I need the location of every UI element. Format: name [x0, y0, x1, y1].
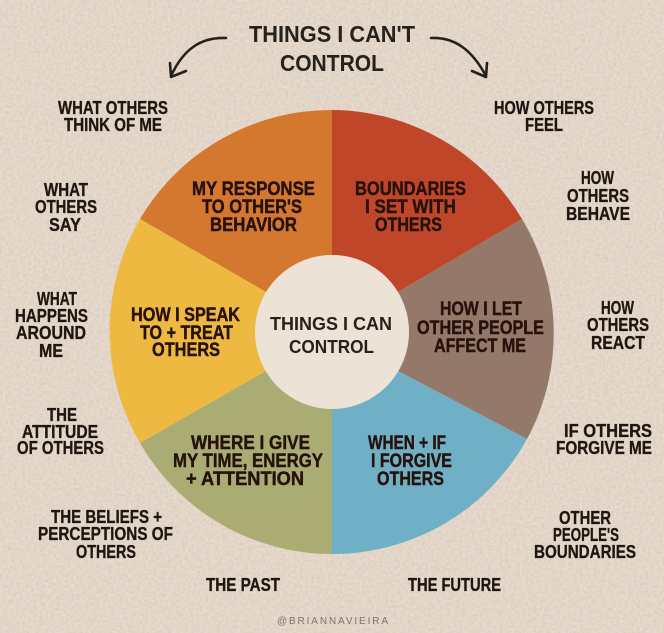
label: when + if: WHEN + IF	[368, 432, 446, 454]
center label: CONTROL	[289, 336, 374, 357]
outer label: how others behave: BEHAVE	[566, 203, 630, 224]
outer label: how others behave	[566, 167, 630, 224]
title	[249, 21, 415, 76]
label: how I speak: HOW I SPEAK	[131, 304, 240, 326]
label: how I speak	[131, 304, 240, 361]
title: THINGS I CAN'T	[249, 21, 415, 47]
outer label: what happens around me: WHAT	[37, 288, 78, 309]
outer label: other people's boundaries: OTHER	[559, 507, 611, 528]
outer label: other people's boundaries: PEOPLE'S	[553, 524, 619, 545]
label: my response: MY RESPONSE	[192, 178, 315, 200]
label: my response	[192, 178, 315, 236]
arrow: left	[170, 38, 226, 77]
label: boundaries: BOUNDARIES	[355, 178, 466, 200]
outer label: how others feel	[494, 97, 594, 135]
outer label: what happens around me: ME	[39, 340, 63, 361]
donut wheel	[110, 110, 554, 554]
outer label: what others say: SAY	[49, 214, 82, 235]
label: boundaries	[355, 178, 466, 236]
label: where I give: + ATTENTION	[186, 468, 304, 490]
segment: when + if	[332, 371, 527, 554]
outer label: the future: THE FUTURE	[408, 574, 501, 595]
label: how I let	[417, 298, 544, 357]
outer label: other people's boundaries: BOUNDARIES	[534, 541, 636, 562]
label: how I let: OTHER PEOPLE	[417, 317, 544, 339]
outer label: the attitude of others: THE	[47, 404, 77, 425]
outer label: if others forgive me	[556, 420, 652, 458]
label: my response: TO OTHER'S	[202, 196, 302, 218]
outer label: how others react	[587, 297, 649, 353]
center circle	[255, 255, 409, 409]
outer label: the attitude of others	[17, 404, 104, 458]
segment: my response	[140, 110, 332, 292]
segment: how I speak	[110, 219, 266, 443]
label: when + if: OTHERS	[377, 468, 444, 490]
credit: @BRIANNAVIEIRA	[277, 616, 388, 627]
outer label: if others forgive me: IF OTHERS	[564, 420, 652, 441]
label: my response: BEHAVIOR	[210, 214, 297, 236]
outer label: how others react: REACT	[591, 332, 646, 353]
outer label: what others think of me: WHAT OTHERS	[58, 97, 168, 118]
outer label: beliefs and perceptions	[38, 506, 173, 562]
title: CONTROL	[280, 50, 384, 76]
segment: where I give	[140, 371, 332, 554]
outer label: how others react: OTHERS	[587, 314, 649, 335]
segment: how I let	[398, 219, 554, 439]
outer label: the past: THE PAST	[206, 574, 281, 595]
outer label: what others say: OTHERS	[35, 196, 97, 217]
outer label: beliefs and perceptions: PERCEPTIONS OF	[38, 523, 173, 544]
outer label: how others feel: HOW OTHERS	[494, 97, 594, 118]
label: when + if	[368, 432, 452, 490]
outer label: beliefs and perceptions: THE BELIEFS +	[51, 506, 162, 527]
label: boundaries: OTHERS	[375, 214, 442, 236]
label: how I speak: TO + TREAT	[140, 322, 233, 344]
label: where I give: MY TIME, ENERGY	[173, 450, 323, 472]
outer label: other people's boundaries	[534, 507, 636, 562]
outer label: what happens around me: HAPPENS	[15, 305, 88, 326]
outer label: how others react: HOW	[601, 297, 634, 318]
arrow: right	[431, 38, 487, 77]
outer label: what others think of me: THINK OF ME	[64, 114, 162, 135]
outer label: how others behave: HOW	[581, 167, 614, 188]
outer label: what others say: WHAT	[44, 179, 89, 200]
center label	[270, 313, 392, 357]
outer label: what happens around me: AROUND	[16, 322, 86, 343]
outer label: how others behave: OTHERS	[567, 185, 629, 206]
outer label: the attitude of others: ATTITUDE	[22, 421, 98, 442]
outer label: the attitude of others: OF OTHERS	[17, 437, 104, 458]
outer label: how others feel: FEEL	[525, 114, 563, 135]
outer label: what happens around me	[15, 288, 88, 361]
center label: THINGS I CAN	[270, 313, 392, 334]
segment: boundaries	[332, 110, 522, 292]
label: when + if: I FORGIVE	[371, 450, 452, 472]
label: boundaries: I SET WITH	[365, 196, 456, 218]
outer label: beliefs and perceptions: OTHERS	[76, 541, 136, 562]
label: where I give	[173, 432, 323, 490]
label: how I let: AFFECT ME	[434, 335, 526, 357]
outer label: what others say	[35, 179, 97, 235]
label: how I speak: OTHERS	[152, 339, 220, 361]
label: how I let: HOW I LET	[440, 298, 522, 320]
label: where I give: WHERE I GIVE	[191, 432, 310, 454]
outer label: what others think of me	[58, 97, 168, 135]
